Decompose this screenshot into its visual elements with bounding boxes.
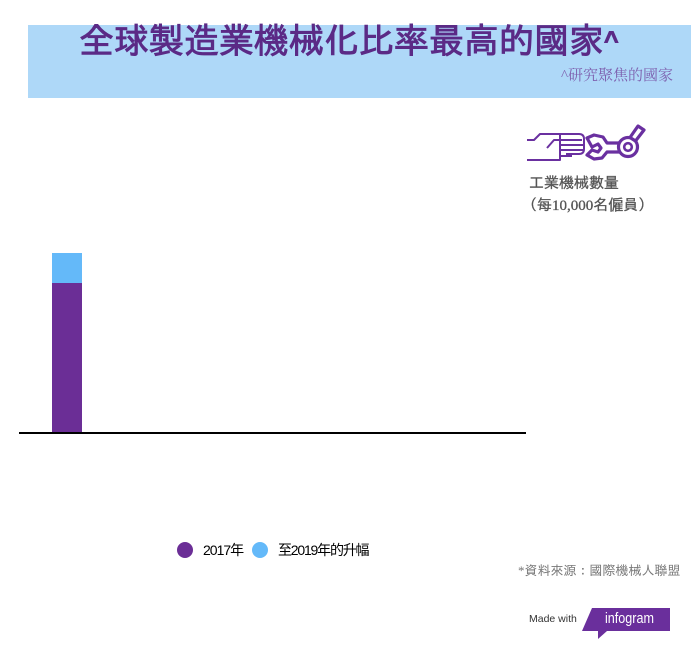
bar segment: 2017 [52, 283, 82, 432]
legend [177, 542, 369, 558]
legend label: 2017: 2017年 [203, 542, 243, 558]
infogram logo: infogram [605, 610, 654, 627]
chart baseline [19, 432, 526, 434]
bar segment: rise to 2019 [52, 253, 82, 283]
robot count label [522, 175, 653, 214]
infogram logo [582, 608, 670, 639]
header band [28, 25, 691, 98]
wrench [587, 135, 620, 159]
arm segment [630, 126, 644, 141]
title: 全球製造業機械化比率最高的國家^ [79, 23, 619, 58]
legend label: rise: 至2019年的升幅 [278, 542, 368, 558]
subtitle note: ^研究聚焦的國家 [561, 68, 673, 84]
robot count label: （每10,000名僱員） [522, 198, 653, 214]
robot count label: 工業機械數量 [529, 176, 619, 192]
legend marker: rise [252, 542, 268, 558]
bar chart [19, 253, 526, 434]
hand outline [527, 134, 584, 160]
arm joint [618, 138, 638, 156]
icon: robot arm gripping hand [527, 124, 646, 161]
legend marker: 2017 [177, 542, 193, 558]
made with label: Made with [529, 613, 577, 625]
source note: *資料來源：國際機械人聯盟 [518, 563, 680, 578]
